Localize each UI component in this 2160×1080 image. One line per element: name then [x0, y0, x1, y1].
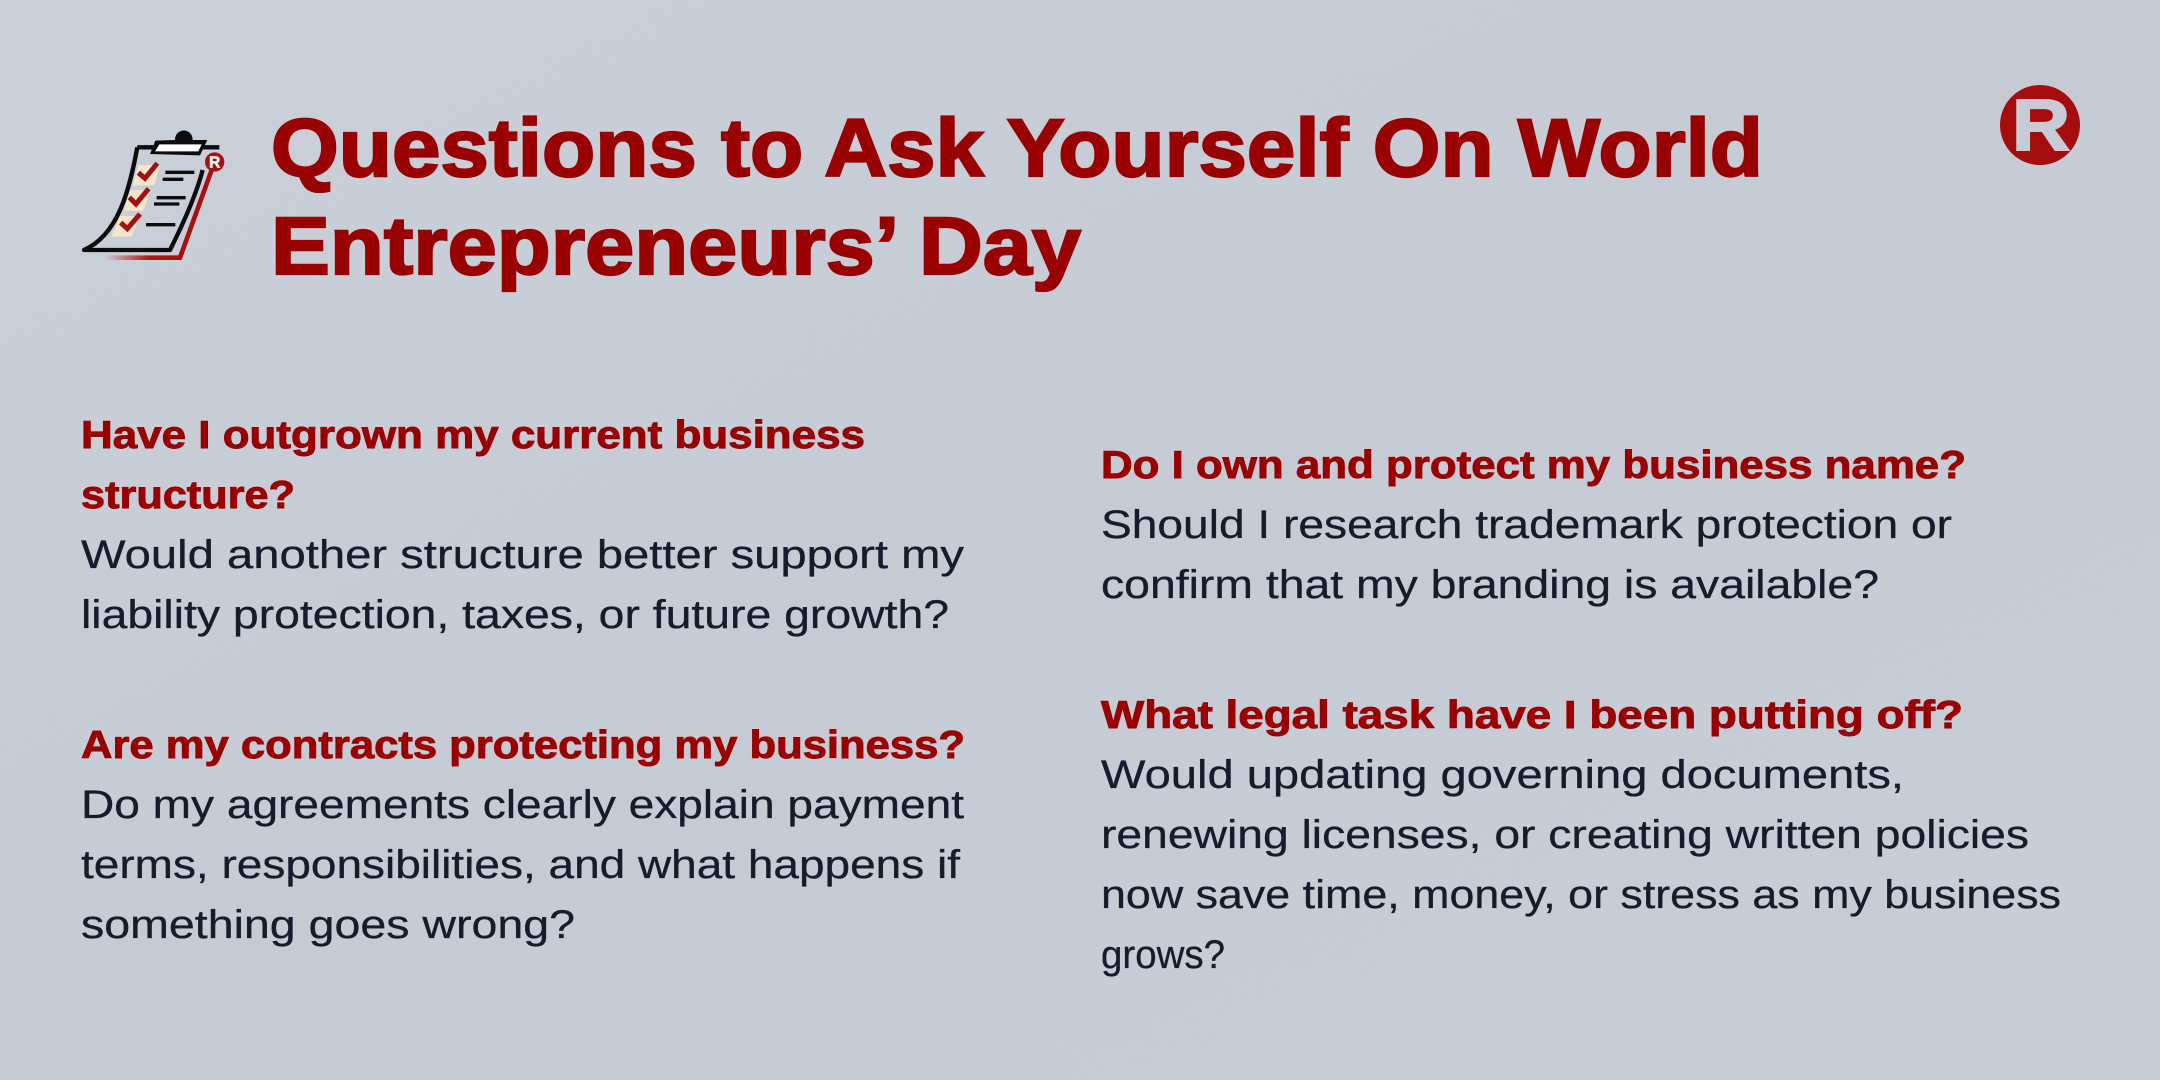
icon: clipboard checklist: R — [209, 154, 220, 171]
question body: Would another structure better support my — [81, 533, 964, 577]
question body — [81, 783, 964, 947]
question body: liability protection, taxes, or future growth? — [81, 593, 949, 637]
title: Questions to Ask Yourself On World — [271, 103, 1763, 194]
title — [271, 103, 1763, 292]
question body: Would updating governing documents, — [1101, 753, 1904, 797]
question body: something goes wrong? — [81, 903, 575, 947]
question heading: structure? — [81, 474, 295, 517]
question heading: Have I outgrown my current business — [81, 414, 865, 457]
question heading: Are my contracts protecting my business? — [81, 724, 965, 767]
question body — [81, 533, 964, 637]
question body — [1101, 753, 2061, 977]
question body: confirm that my branding is available? — [1101, 563, 1879, 607]
question body: now save time, money, or stress as my business — [1101, 873, 2061, 917]
icon: clipboard checklist — [84, 130, 224, 258]
question heading — [81, 414, 865, 517]
logo: circled R: R — [2012, 86, 2070, 166]
question body: Should I research trademark protection or — [1101, 503, 1952, 547]
question body — [1101, 503, 1952, 607]
question heading: What legal task have I been putting off? — [1101, 694, 1963, 737]
title: Entrepreneurs’ Day — [271, 201, 1081, 292]
question block: contracts — [81, 724, 965, 947]
question block: business name — [1101, 444, 1966, 607]
question body: grows? — [1101, 933, 1225, 977]
question block: legal task — [1101, 694, 2061, 977]
logo: circled R — [2000, 85, 2080, 166]
question heading: Do I own and protect my business name? — [1101, 444, 1966, 487]
question body: renewing licenses, or creating written policies — [1101, 813, 2029, 857]
question block: business structure — [81, 414, 964, 637]
question body: terms, responsibilities, and what happens if — [81, 843, 961, 887]
question body: Do my agreements clearly explain payment — [81, 783, 964, 827]
